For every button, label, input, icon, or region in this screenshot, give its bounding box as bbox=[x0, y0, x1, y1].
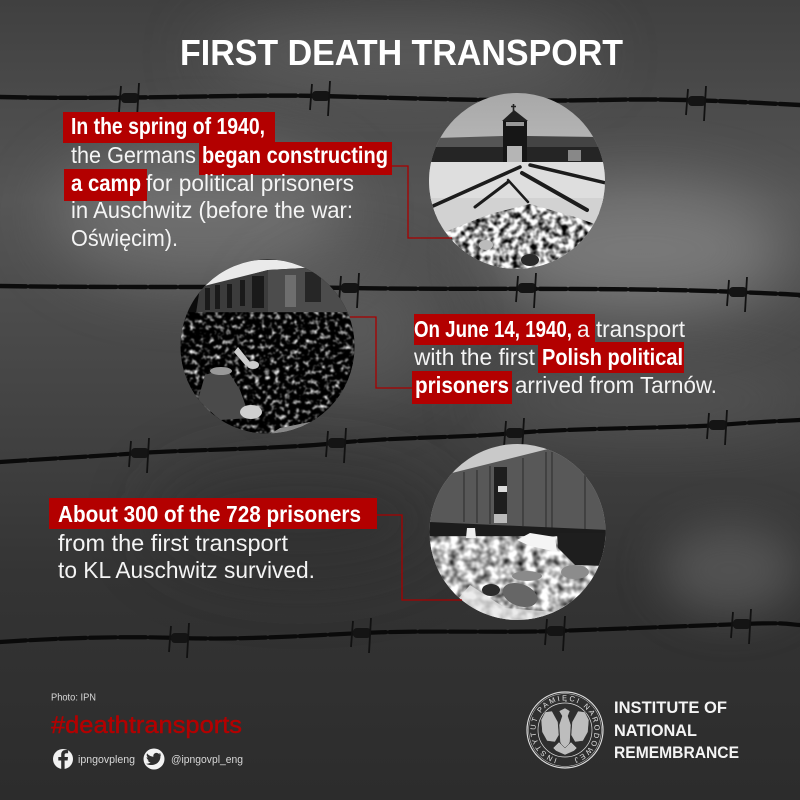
highlight bars bbox=[412, 314, 684, 404]
text block: spring 1940: for political prisoners bbox=[146, 170, 354, 196]
photo credit: Photo: IPN bbox=[51, 692, 96, 704]
institute name: REMEMBRANCE bbox=[614, 744, 739, 762]
text block: June 14, 1940: arrived from Tarnów. bbox=[515, 372, 717, 398]
logo: IPN seal: INSTYTUT PAMIĘCI NARODOWEJ bbox=[530, 695, 600, 764]
text block: survivors: to KL Auschwitz survived. bbox=[58, 557, 315, 583]
text block: survivors bbox=[49, 498, 377, 583]
barbed wire 2 bbox=[0, 273, 800, 312]
barbed wire 1 bbox=[0, 81, 800, 121]
institute name: INSTITUTE OF bbox=[614, 699, 727, 717]
eagle bbox=[541, 708, 589, 755]
institute name bbox=[614, 699, 739, 762]
text block: spring 1940 bbox=[63, 112, 392, 251]
text block: spring 1940: the Germans bbox=[71, 142, 196, 168]
highlight bars bbox=[63, 112, 392, 201]
text block: June 14, 1940: Polish political bbox=[542, 344, 683, 370]
text block: June 14, 1940: On June 14, 1940, bbox=[414, 316, 572, 342]
text block: survivors: from the first transport bbox=[58, 530, 289, 556]
photo: freight wagon and belongings bbox=[429, 444, 607, 620]
barbed wire 3 bbox=[0, 410, 800, 473]
connector line: first photo bbox=[392, 166, 452, 238]
text block: spring 1940: Oświęcim). bbox=[71, 225, 178, 251]
highlight bar bbox=[49, 498, 377, 529]
text block: spring 1940: a camp bbox=[71, 170, 141, 196]
icon: twitter bbox=[144, 748, 164, 770]
hashtag: #deathtransports bbox=[51, 712, 242, 739]
text block: spring 1940: In the spring of 1940, bbox=[71, 113, 265, 139]
photo: crowd at train bbox=[180, 259, 356, 434]
title: FIRST DEATH TRANSPORT bbox=[180, 32, 623, 73]
barbed wire 4 bbox=[0, 609, 800, 658]
facebook handle: ipngovpleng bbox=[78, 754, 135, 766]
text block: June 14, 1940: a transport bbox=[577, 316, 686, 342]
text block: spring 1940: began constructing bbox=[202, 142, 388, 168]
institute name: NATIONAL bbox=[614, 722, 697, 740]
text block: spring 1940: in Auschwitz (before the war: bbox=[71, 197, 353, 223]
text block: June 14, 1940: prisoners bbox=[415, 372, 509, 398]
twitter handle: @ipngovpl_eng bbox=[171, 754, 243, 766]
icon: facebook bbox=[53, 749, 73, 769]
text block: survivors: About 300 of the 728 prisoners bbox=[58, 501, 361, 527]
photo: Auschwitz gate bbox=[429, 93, 606, 270]
text block: June 14, 1940: with the first bbox=[413, 344, 536, 370]
connector line: third photo bbox=[377, 515, 462, 600]
connector line: second photo bbox=[350, 317, 412, 388]
text block: June 14, 1940 bbox=[412, 314, 717, 404]
